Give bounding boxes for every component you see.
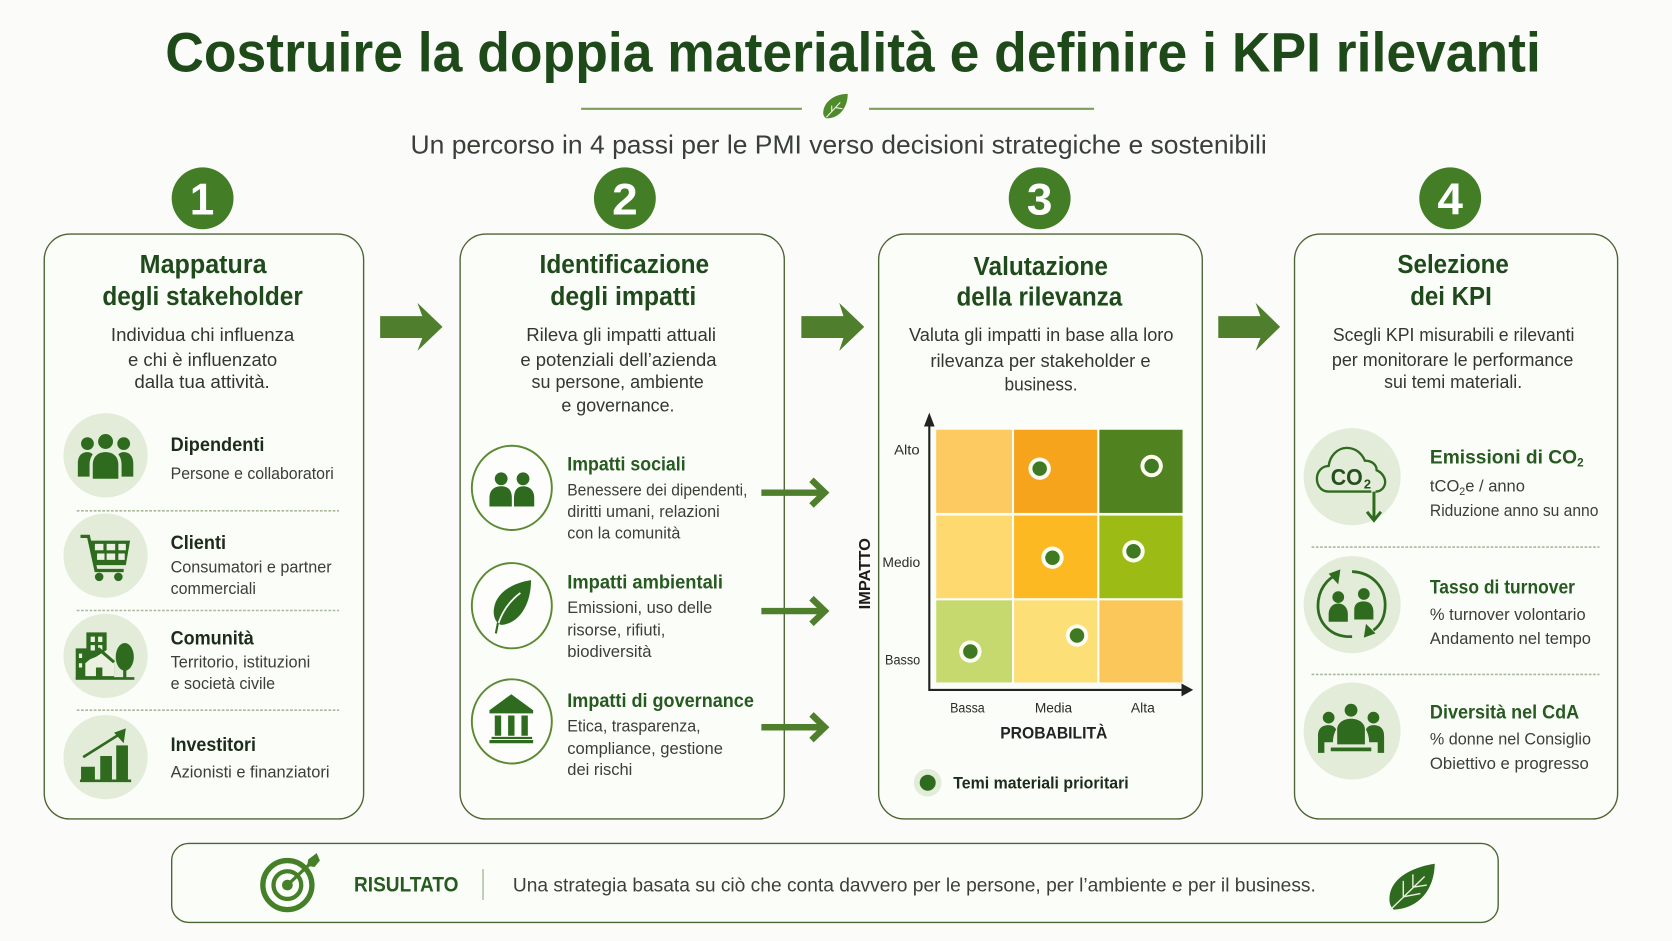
heading — [1397, 251, 1509, 311]
item: investitori: Investitori — [171, 735, 256, 756]
y axis labels — [857, 441, 921, 667]
x axis labels: Media — [1035, 699, 1072, 715]
panel: mappatura degli stakeholder — [44, 234, 364, 819]
y axis labels: Alto — [894, 441, 920, 457]
item: impatti sociali: Impatti sociali — [567, 454, 686, 475]
heading: Identificazione — [540, 251, 709, 279]
axes — [924, 413, 1193, 696]
item: impatti sociali: con la comunità — [567, 524, 681, 543]
step number 1 — [172, 167, 234, 229]
icon: two people — [489, 472, 534, 507]
arrow: impatti ambientali — [761, 598, 825, 624]
kpi: tasso di turnover: Tasso di turnover — [1430, 577, 1575, 598]
icon: target — [263, 853, 320, 910]
icon: co2 cloud — [1317, 448, 1385, 520]
kpi: emissioni di co2 — [1304, 428, 1598, 525]
kpi: tasso di turnover: % turnover volontario — [1430, 605, 1586, 624]
description: per monitorare le performance — [1332, 349, 1573, 370]
item: impatti di governance: dei rischi — [567, 760, 632, 779]
arrow: impatti sociali — [761, 480, 825, 505]
step number 2: 2 — [612, 174, 638, 224]
legend: Temi materiali prioritari — [953, 774, 1129, 793]
item: impatti ambientali: risorse, rifiuti, — [567, 621, 665, 640]
item: impatti sociali: Benessere dei dipendenti, — [567, 480, 747, 499]
icon: people — [78, 434, 133, 479]
arrow: impatti di governance — [761, 714, 825, 740]
description: sui temi materiali. — [1384, 371, 1522, 392]
description: e chi è influenzato — [128, 349, 277, 370]
icon: leaf — [494, 580, 531, 633]
icon: co2 cloud: CO — [1331, 464, 1363, 490]
step number 3 — [1009, 167, 1071, 229]
item: impatti ambientali: biodiversità — [567, 642, 652, 661]
item: impatti sociali: diritti umani, relazioni — [567, 502, 720, 521]
matrix cells — [936, 430, 1183, 682]
panel: selezione dei kpi — [1295, 234, 1618, 819]
item: clienti: Consumatori e partner — [171, 558, 332, 577]
arrow: step 2 to 3 — [801, 303, 864, 351]
description — [520, 324, 717, 416]
subtitle: Un percorso in 4 passi per le PMI verso decisioni strategiche e sostenibili — [411, 130, 1267, 160]
step number 3: 3 — [1027, 174, 1052, 224]
heading: Valutazione — [974, 253, 1108, 281]
icon: city — [76, 632, 134, 680]
kpi: emissioni di co2: 2 — [1459, 486, 1465, 498]
title: Costruire la doppia materialità e definire i KPI rilevanti — [165, 21, 1541, 83]
item: dipendenti — [63, 413, 334, 497]
icon: growth chart — [80, 728, 131, 782]
icon: turnover people — [1318, 569, 1385, 638]
item: impatti di governance: compliance, gestione — [567, 739, 723, 758]
description: e governance. — [561, 395, 674, 416]
title divider with leaf — [581, 94, 1094, 118]
item: clienti — [63, 513, 332, 598]
x axis labels: PROBABILITÀ — [1000, 723, 1107, 742]
item: comunità: Territorio, istituzioni — [171, 653, 310, 672]
kpi: emissioni di co2: Emissioni di CO — [1430, 447, 1577, 468]
heading: Mappatura — [140, 251, 267, 279]
item: clienti: Clienti — [171, 533, 226, 554]
data points — [959, 455, 1163, 663]
item: comunità — [63, 614, 310, 698]
kpi: emissioni di co2: 2 — [1577, 457, 1584, 470]
description: business. — [1004, 373, 1078, 394]
item: investitori: Azionisti e finanziatori — [171, 762, 329, 781]
result bar: Una strategia basata su ciò che conta davvero per le persone, per l’ambiente e per il business. — [513, 874, 1316, 896]
description — [1332, 324, 1574, 392]
panel: valutazione della rilevanza — [857, 234, 1202, 819]
result bar: RISULTATO — [354, 872, 459, 896]
kpi: emissioni di co2: Riduzione anno su anno — [1430, 501, 1598, 520]
icon: board meeting — [1318, 704, 1384, 753]
item: impatti sociali — [472, 446, 747, 543]
heading — [102, 251, 303, 311]
kpi: emissioni di co2: e / anno — [1465, 477, 1525, 496]
description: rilevanza per stakeholder e — [930, 350, 1151, 371]
x axis labels: Bassa — [950, 699, 985, 715]
y axis labels: IMPATTO — [857, 538, 874, 609]
icon: leaf — [1389, 864, 1435, 910]
kpi: tasso di turnover: Andamento nel tempo — [1430, 629, 1591, 648]
item: dipendenti: Dipendenti — [171, 435, 264, 456]
x axis labels — [950, 699, 1155, 742]
x axis labels: Alta — [1131, 699, 1155, 715]
legend — [914, 769, 1129, 797]
y axis labels: Basso — [885, 651, 920, 667]
heading: degli impatti — [550, 283, 696, 311]
heading — [956, 253, 1123, 312]
description: e potenziali dell’azienda — [520, 349, 717, 370]
description: Valuta gli impatti in base alla loro — [909, 324, 1173, 345]
description: Scegli KPI misurabili e rilevanti — [1333, 324, 1574, 345]
item: investitori — [63, 715, 329, 799]
step number 4: 4 — [1437, 174, 1463, 224]
icon: cart — [81, 536, 130, 581]
panel: identificazione degli impatti — [460, 234, 784, 819]
item: impatti ambientali: Impatti ambientali — [567, 573, 723, 594]
heading: della rilevanza — [956, 284, 1123, 312]
heading: dei KPI — [1410, 283, 1492, 311]
description: dalla tua attività. — [134, 371, 270, 392]
heading — [540, 251, 709, 311]
item: clienti: commerciali — [171, 579, 256, 598]
item: comunità: Comunità — [171, 629, 254, 650]
item: impatti di governance: Impatti di governance — [567, 691, 754, 712]
arrow: step 1 to 2 — [380, 303, 443, 351]
y axis labels: Medio — [882, 554, 921, 570]
icon: institution — [489, 694, 533, 743]
step number 2 — [594, 167, 656, 229]
item: comunità: e società civile — [171, 674, 275, 693]
chart: materiality matrix — [857, 413, 1193, 742]
icon: co2 cloud: 2 — [1364, 476, 1371, 491]
item: impatti ambientali: Emissioni, uso delle — [567, 598, 712, 617]
kpi: diversità nel cda: Obiettivo e progresso — [1430, 754, 1589, 773]
kpi: diversità nel cda: Diversità nel CdA — [1430, 703, 1579, 724]
item: dipendenti: Persone e collaboratori — [171, 464, 334, 483]
description — [909, 324, 1173, 394]
description — [111, 324, 295, 392]
description: Individua chi influenza — [111, 324, 295, 345]
result bar — [172, 843, 1498, 922]
heading: Selezione — [1397, 251, 1509, 279]
description: Rileva gli impatti attuali — [526, 324, 716, 345]
kpi: diversità nel cda — [1304, 682, 1591, 780]
step number 4 — [1419, 167, 1481, 229]
item: impatti di governance: Etica, trasparenza, — [567, 717, 701, 736]
heading: degli stakeholder — [102, 283, 303, 311]
kpi: tasso di turnover — [1304, 556, 1591, 653]
kpi: emissioni di co2: tCO — [1430, 477, 1459, 496]
step number 1: 1 — [190, 174, 214, 224]
kpi: diversità nel cda: % donne nel Consiglio — [1430, 729, 1591, 748]
item: impatti di governance — [472, 679, 754, 779]
item: impatti ambientali — [472, 563, 723, 661]
arrow: step 3 to 4 — [1218, 303, 1280, 351]
description: su persone, ambiente — [532, 371, 704, 392]
